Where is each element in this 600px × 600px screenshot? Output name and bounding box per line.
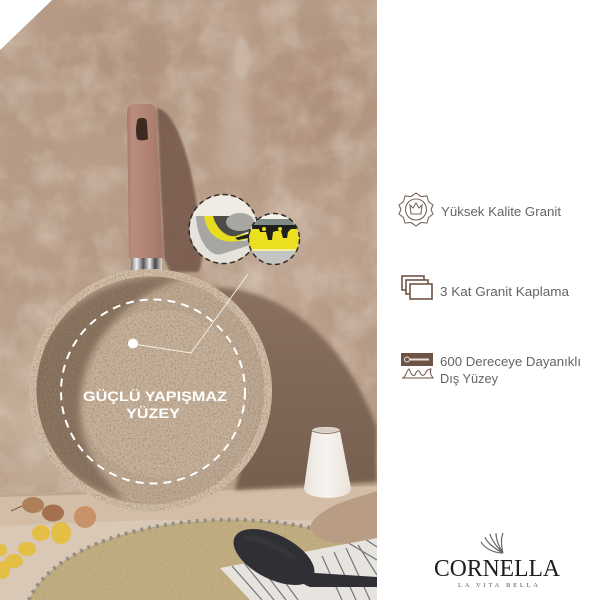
white cup xyxy=(304,427,351,498)
plaster wall xyxy=(0,0,377,495)
wordmark: CORNELLA xyxy=(434,556,561,582)
woven placemat xyxy=(29,520,377,600)
striped napkin xyxy=(220,533,377,600)
handle shadow on wall xyxy=(157,108,202,272)
onions xyxy=(11,497,96,528)
icon: palm leaf xyxy=(481,533,503,553)
icon: stacked layers xyxy=(402,276,432,299)
icon: crown medal xyxy=(399,193,433,226)
panel: product photo xyxy=(0,0,377,600)
feature: high quality granite xyxy=(399,193,562,226)
black spoon xyxy=(234,529,377,587)
inset: coating detail xyxy=(248,213,300,264)
feature: three layer coating xyxy=(402,276,569,299)
table surface xyxy=(0,482,377,600)
frying pan xyxy=(29,268,272,513)
brand logo xyxy=(434,533,561,589)
pan handle xyxy=(127,104,163,270)
icon: heated element with flames xyxy=(401,353,433,378)
label: Yüksek Kalite Granit xyxy=(441,205,562,219)
surface label: GÜÇLÜ YAPIŞMAZ xyxy=(83,388,228,404)
tagline: LA VITA BELLA xyxy=(458,582,538,589)
inset: pan layer cross-section xyxy=(189,194,258,266)
pan shadow on wall xyxy=(215,287,377,490)
surface label xyxy=(84,389,227,418)
non-stick surface dashed outline xyxy=(61,300,245,484)
feature: 600 degree resistant exterior xyxy=(401,353,581,386)
label: Dış Yüzey xyxy=(440,372,499,386)
label: 3 Kat Granit Kaplama xyxy=(440,285,569,299)
linen cloth xyxy=(311,491,377,544)
label: 600 Dereceye Dayanıklı xyxy=(440,355,581,369)
callout leader line xyxy=(128,274,248,353)
pasta shells xyxy=(0,522,71,579)
surface label: YÜZEY xyxy=(126,405,181,421)
label xyxy=(440,355,581,386)
